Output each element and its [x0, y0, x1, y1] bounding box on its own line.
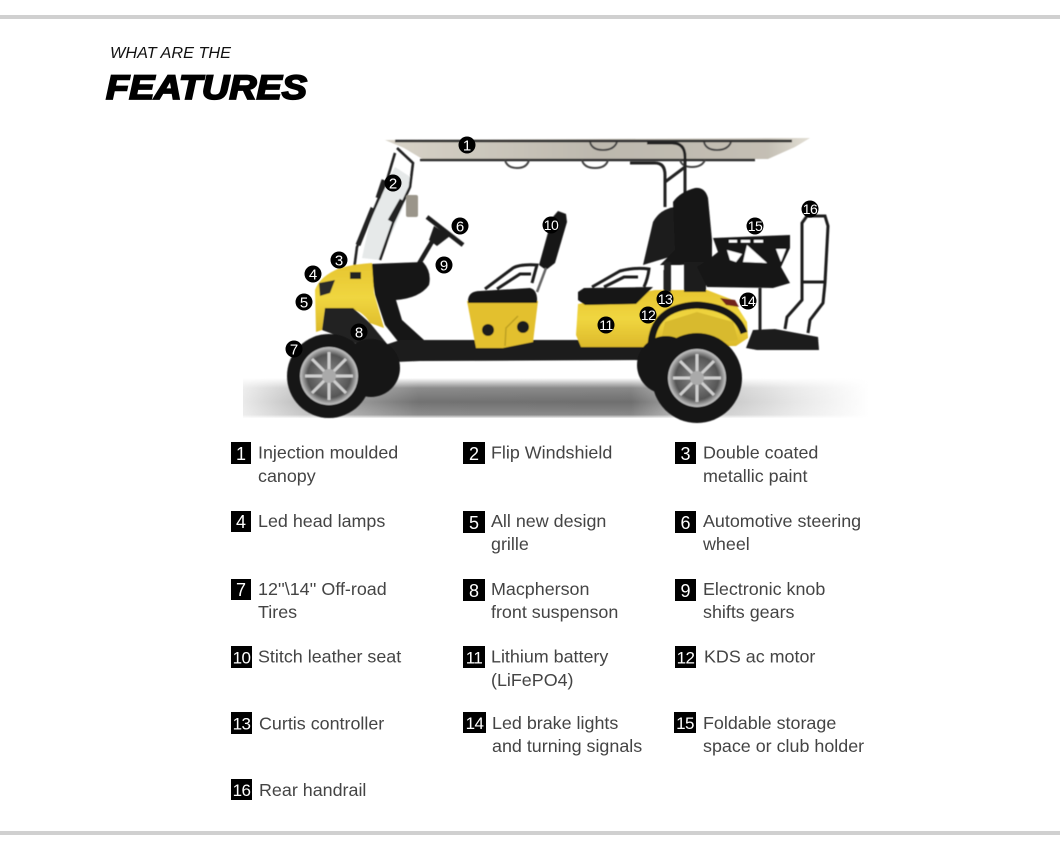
canopy: [385, 138, 810, 168]
marker 4: [304, 266, 322, 284]
item 5: 5: [469, 513, 479, 533]
middle seat box: [467, 301, 538, 348]
item 1: canopy: [258, 466, 316, 486]
item 13: 13: [233, 714, 250, 734]
windshield: [353, 148, 418, 277]
item 1: [231, 442, 398, 486]
item 7: 7: [236, 580, 246, 600]
item 8: [463, 579, 618, 622]
middle seat armrest: [485, 265, 537, 289]
marker 12: 12: [641, 307, 656, 323]
rear seat backs: [643, 188, 712, 292]
marker 15: 15: [748, 218, 763, 234]
rear rack storage: [697, 235, 790, 288]
marker 6: 6: [456, 218, 464, 236]
item 14: 14: [466, 714, 483, 733]
rear handrail: [785, 216, 828, 333]
item 9: shifts gears: [703, 602, 795, 622]
item 8: Macpherson: [491, 579, 589, 599]
item 14: Led brake lights: [492, 713, 618, 733]
item 16: 16: [233, 781, 250, 800]
top divider bar: [0, 15, 1060, 19]
item 4: 4: [236, 512, 246, 532]
marker 4: 4: [309, 266, 317, 284]
item 15: 15: [676, 714, 694, 733]
item 1: Injection moulded: [258, 442, 398, 462]
heading: features: FEATURES: [106, 69, 307, 107]
bottom divider bar: [0, 831, 1060, 835]
marker 5: [296, 294, 312, 312]
marker 9: [436, 256, 452, 274]
far rear wheel: [637, 336, 695, 394]
front yellow cowl: [315, 263, 384, 332]
rear seat cushion: [578, 287, 653, 305]
marker 10: 10: [544, 217, 559, 233]
item 14: [463, 712, 642, 756]
item 6: Automotive steering: [703, 511, 861, 531]
item 15: space or club holder: [703, 736, 864, 756]
item 15: Foldable storage: [703, 713, 836, 733]
item 11: [463, 646, 608, 690]
marker 3: [330, 252, 348, 270]
rear support post: [758, 288, 762, 330]
far front wheel: [342, 339, 400, 397]
item 15: [674, 712, 864, 756]
middle seat cushion: [468, 288, 537, 303]
marker 6: [452, 218, 468, 236]
item 14: and turning signals: [492, 736, 642, 756]
middle seat back: [537, 211, 567, 292]
item 11: Lithium battery: [491, 646, 608, 666]
marker 1: 1: [463, 138, 471, 154]
item 2: 2: [469, 444, 479, 464]
item 7: [231, 579, 387, 622]
steering column hub: [429, 226, 450, 246]
heading: what are the: WHAT ARE THE: [110, 45, 231, 62]
item 10: Stitch leather seat: [258, 646, 401, 666]
item 10: 10: [233, 648, 250, 668]
item 7: 12''\14'' Off-road: [258, 579, 387, 599]
rear inner wheel well: [660, 312, 738, 345]
marker 8: [350, 324, 368, 342]
ground shadow: [243, 378, 869, 418]
item 3: [675, 442, 818, 486]
item 3: metallic paint: [703, 466, 807, 486]
marker 2: 2: [389, 176, 397, 192]
item 8: front suspenson: [491, 602, 618, 622]
marker 7: [286, 340, 302, 358]
item 3: 3: [680, 444, 691, 464]
item 2: Flip Windshield: [491, 442, 612, 462]
fender arch: [651, 305, 744, 347]
item 6: wheel: [702, 534, 750, 554]
rear seat armrest: [592, 268, 649, 287]
marker 11: 11: [599, 317, 613, 333]
marker 9: 9: [440, 258, 448, 274]
item 11: (LiFePO4): [491, 670, 574, 690]
marker 3: 3: [335, 252, 343, 270]
item 12: KDS ac motor: [704, 646, 815, 666]
item 13: Curtis controller: [259, 714, 384, 734]
marker 1: [458, 136, 476, 154]
item 8: 8: [469, 581, 479, 601]
item 9: 9: [680, 581, 691, 601]
rear lamp: [720, 298, 739, 307]
dashboard: [370, 262, 430, 344]
head lamp: [319, 280, 335, 296]
item 3: Double coated: [703, 442, 818, 462]
marker 14: 14: [741, 293, 756, 309]
rear platform: [746, 329, 819, 350]
item 4: Led head lamps: [258, 511, 385, 531]
item 5: [463, 511, 606, 554]
item 5: grille: [491, 534, 529, 554]
item 6: [675, 511, 861, 554]
hood vent: [350, 272, 361, 279]
item 1: 1: [236, 444, 246, 464]
marker 2: [384, 174, 402, 192]
marker 7: 7: [290, 342, 298, 358]
item 12: 12: [677, 648, 694, 668]
item 16: Rear handrail: [259, 780, 366, 800]
item 11: 11: [466, 648, 482, 668]
item 5: All new design: [491, 511, 606, 531]
steering wheel: [417, 217, 463, 267]
rear yellow body: [576, 290, 748, 347]
item 6: 6: [680, 513, 691, 533]
item 7: Tires: [258, 602, 297, 622]
item 9: [675, 579, 825, 622]
rear canopy struts: [630, 143, 685, 290]
front suspension: [322, 308, 392, 362]
cart body artwork: [287, 138, 828, 423]
callout markers: [286, 136, 818, 358]
marker 8: 8: [355, 324, 363, 342]
marker 13: 13: [658, 291, 673, 307]
feature list: [231, 442, 864, 800]
marker 16: 16: [803, 201, 818, 217]
front wheel: [287, 334, 371, 418]
golf cart illustration: [243, 136, 869, 423]
floor chassis: [385, 340, 655, 362]
marker 5: 5: [300, 294, 308, 312]
item 9: Electronic knob: [703, 579, 825, 599]
rear wheel: [652, 333, 742, 423]
